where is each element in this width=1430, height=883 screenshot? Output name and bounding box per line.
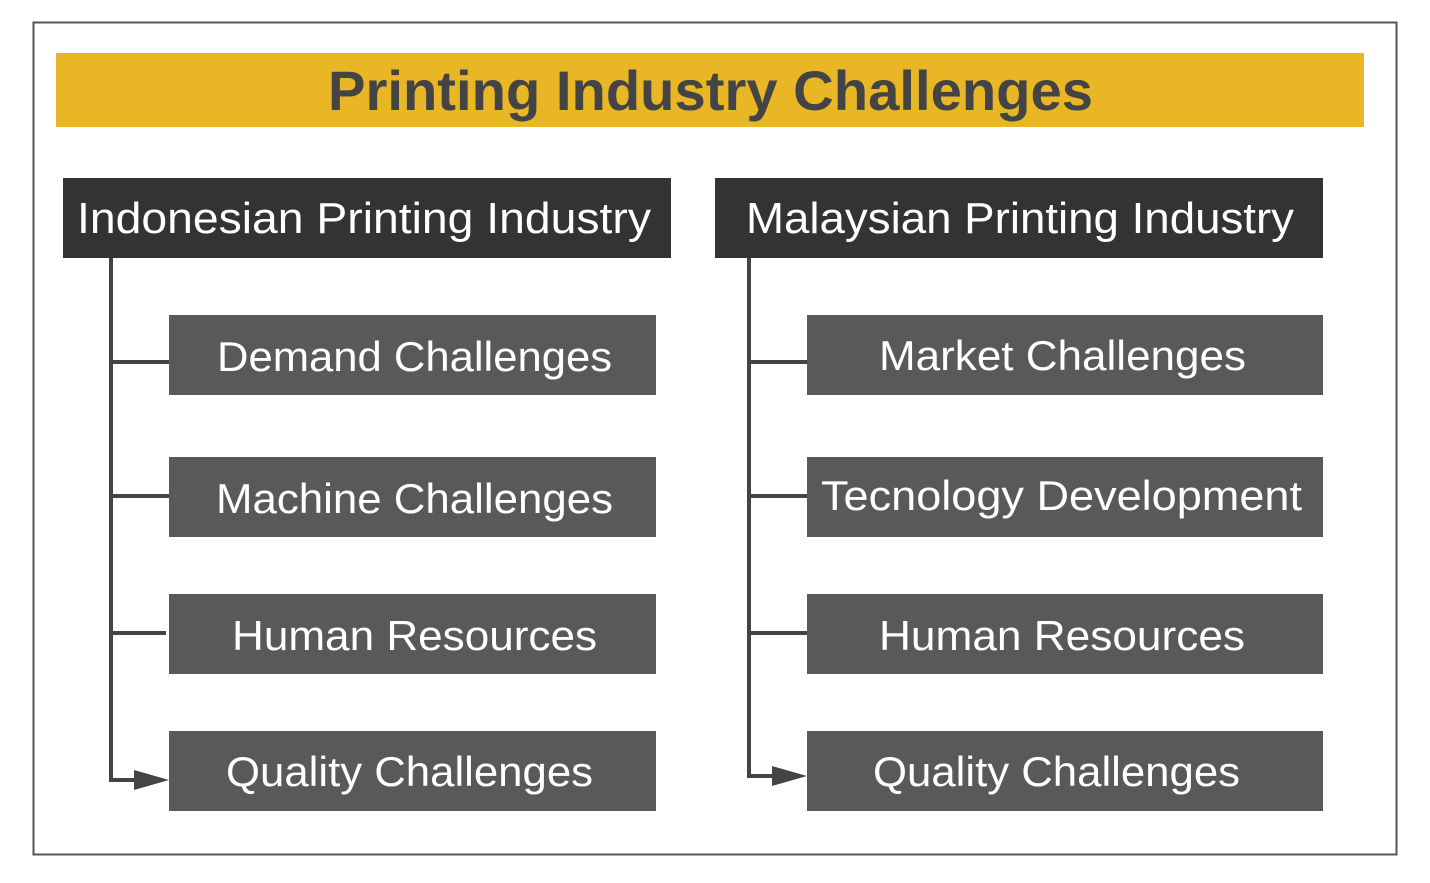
box: tecnology development [807,457,1323,537]
box: demand challenges [169,315,656,395]
header: malaysian: Malaysian Printing Industry [746,194,1294,243]
box: quality challenges: Quality Challenges [873,748,1240,795]
box: quality challenges [169,731,656,811]
header: malaysian [715,178,1323,258]
box: human resources [807,594,1323,674]
box: machine challenges: Machine Challenges [216,475,613,522]
box: tecnology development: Tecnology Development [821,472,1302,519]
box: demand challenges: Demand Challenges [217,333,612,380]
connector: malaysian tree [749,258,807,786]
box: market challenges [807,315,1323,395]
panel: indonesian [63,178,671,811]
box: human resources: Human Resources [879,612,1245,659]
box: quality challenges: Quality Challenges [226,748,593,795]
header: indonesian: Indonesian Printing Industry [77,194,651,243]
box: human resources: Human Resources [232,612,597,659]
box: machine challenges [169,457,656,537]
connector: indonesian tree [111,258,169,790]
box: market challenges: Market Challenges [879,332,1246,379]
box: quality challenges [807,731,1323,811]
box: human resources [169,594,656,674]
header: indonesian [63,178,671,258]
title bar [56,53,1364,127]
title: Printing Industry Challenges [328,59,1093,122]
panel: malaysian [715,178,1323,811]
